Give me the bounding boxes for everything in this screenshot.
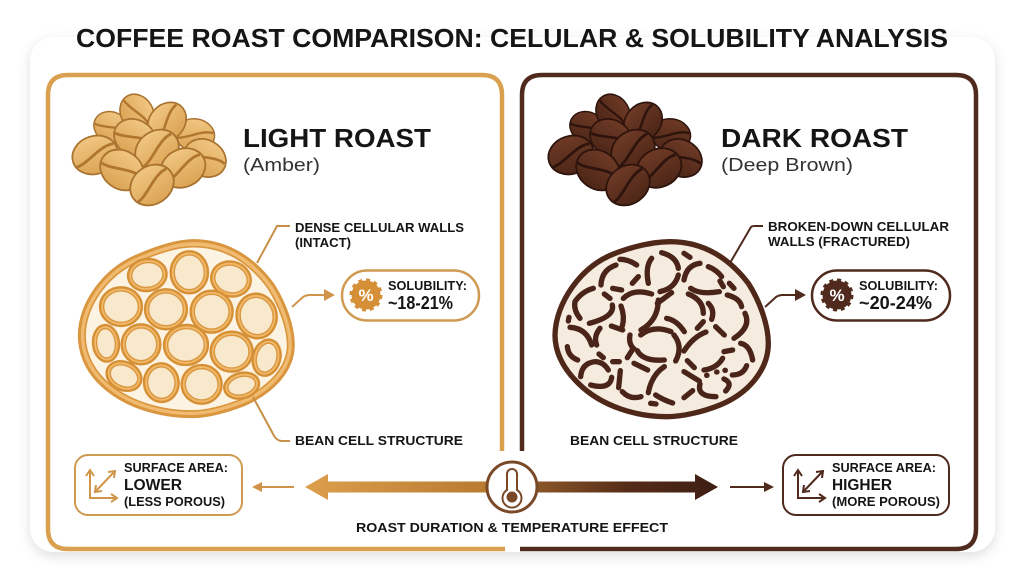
heading: dark roast: DARK ROAST	[721, 123, 908, 153]
label: bean cell structure: BEAN CELL STRUCTURE	[295, 433, 463, 448]
callout: surface area higher	[783, 455, 949, 515]
text: surface area higher: SURFACE AREA:	[832, 461, 936, 475]
arrow: to solubility	[292, 289, 335, 307]
text: solubility dark	[859, 279, 938, 313]
panel: light roast	[48, 75, 505, 549]
text: solubility light: SOLUBILITY:	[388, 279, 467, 293]
text: surface area lower: (LESS POROUS)	[124, 495, 225, 509]
text: solubility light	[388, 279, 467, 313]
icon: percent badge: %	[829, 286, 845, 305]
text: solubility light: ~18-21%	[388, 293, 453, 313]
label: dense cellular walls: DENSE CELLULAR WALLS	[295, 220, 464, 235]
label: bean cell structure: BEAN CELL STRUCTURE	[570, 433, 738, 448]
label: dense cellular walls	[295, 220, 464, 250]
label: broken-down cellular walls	[768, 219, 950, 249]
arrow: to solubility	[765, 289, 806, 307]
text: surface area higher: (MORE POROUS)	[832, 495, 940, 509]
label: broken-down cellular walls: WALLS (FRACTURED)	[768, 234, 910, 249]
icon: surface axes dark	[794, 470, 825, 502]
heading: light roast: LIGHT ROAST	[243, 123, 431, 153]
icon: dark roast beans	[543, 88, 709, 214]
icon: surface axes light	[86, 470, 117, 502]
text: surface area higher	[832, 461, 940, 509]
text: surface area lower	[124, 461, 228, 509]
panel border: light roast	[48, 75, 505, 549]
label: dense cellular walls: (INTACT)	[295, 235, 351, 250]
arrow: to surface area lower	[252, 482, 294, 492]
subheading: amber: (Amber)	[243, 155, 320, 175]
icon: thermometer	[487, 462, 537, 512]
text: solubility dark: SOLUBILITY:	[859, 279, 938, 293]
callout: surface area lower	[75, 455, 242, 515]
arrow: toward dark roast	[534, 474, 718, 500]
diagram: intact bean cell structure	[79, 241, 293, 417]
central gradient arrow	[305, 462, 718, 512]
icon: percent badge: %	[358, 286, 374, 305]
text: solubility dark: ~20-24%	[859, 293, 932, 313]
text: surface area lower: LOWER	[124, 477, 182, 494]
callout: solubility light	[342, 270, 479, 320]
arrow: to surface area higher	[730, 482, 774, 492]
leader line: dense walls	[257, 226, 290, 263]
icon: light roast beans	[67, 88, 233, 214]
leader line: broken walls	[730, 226, 763, 263]
callout: solubility dark	[812, 270, 950, 320]
arrow: toward light roast	[305, 474, 490, 500]
subheading: deep brown: (Deep Brown)	[721, 155, 853, 175]
panel: dark roast	[520, 75, 976, 549]
text: surface area higher: HIGHER	[832, 477, 892, 494]
label: broken-down cellular walls: BROKEN-DOWN CELLULAR	[768, 219, 950, 234]
diagram: fractured bean cell structure	[555, 242, 768, 417]
caption: roast effect: ROAST DURATION & TEMPERATURE EFFECT	[356, 520, 668, 535]
text: surface area lower: SURFACE AREA:	[124, 461, 228, 475]
panel border: dark roast	[520, 75, 976, 549]
title: COFFEE ROAST COMPARISON: CELULAR & SOLUBILITY ANALYSIS	[76, 23, 948, 53]
leader line: bean cell structure	[253, 397, 290, 441]
